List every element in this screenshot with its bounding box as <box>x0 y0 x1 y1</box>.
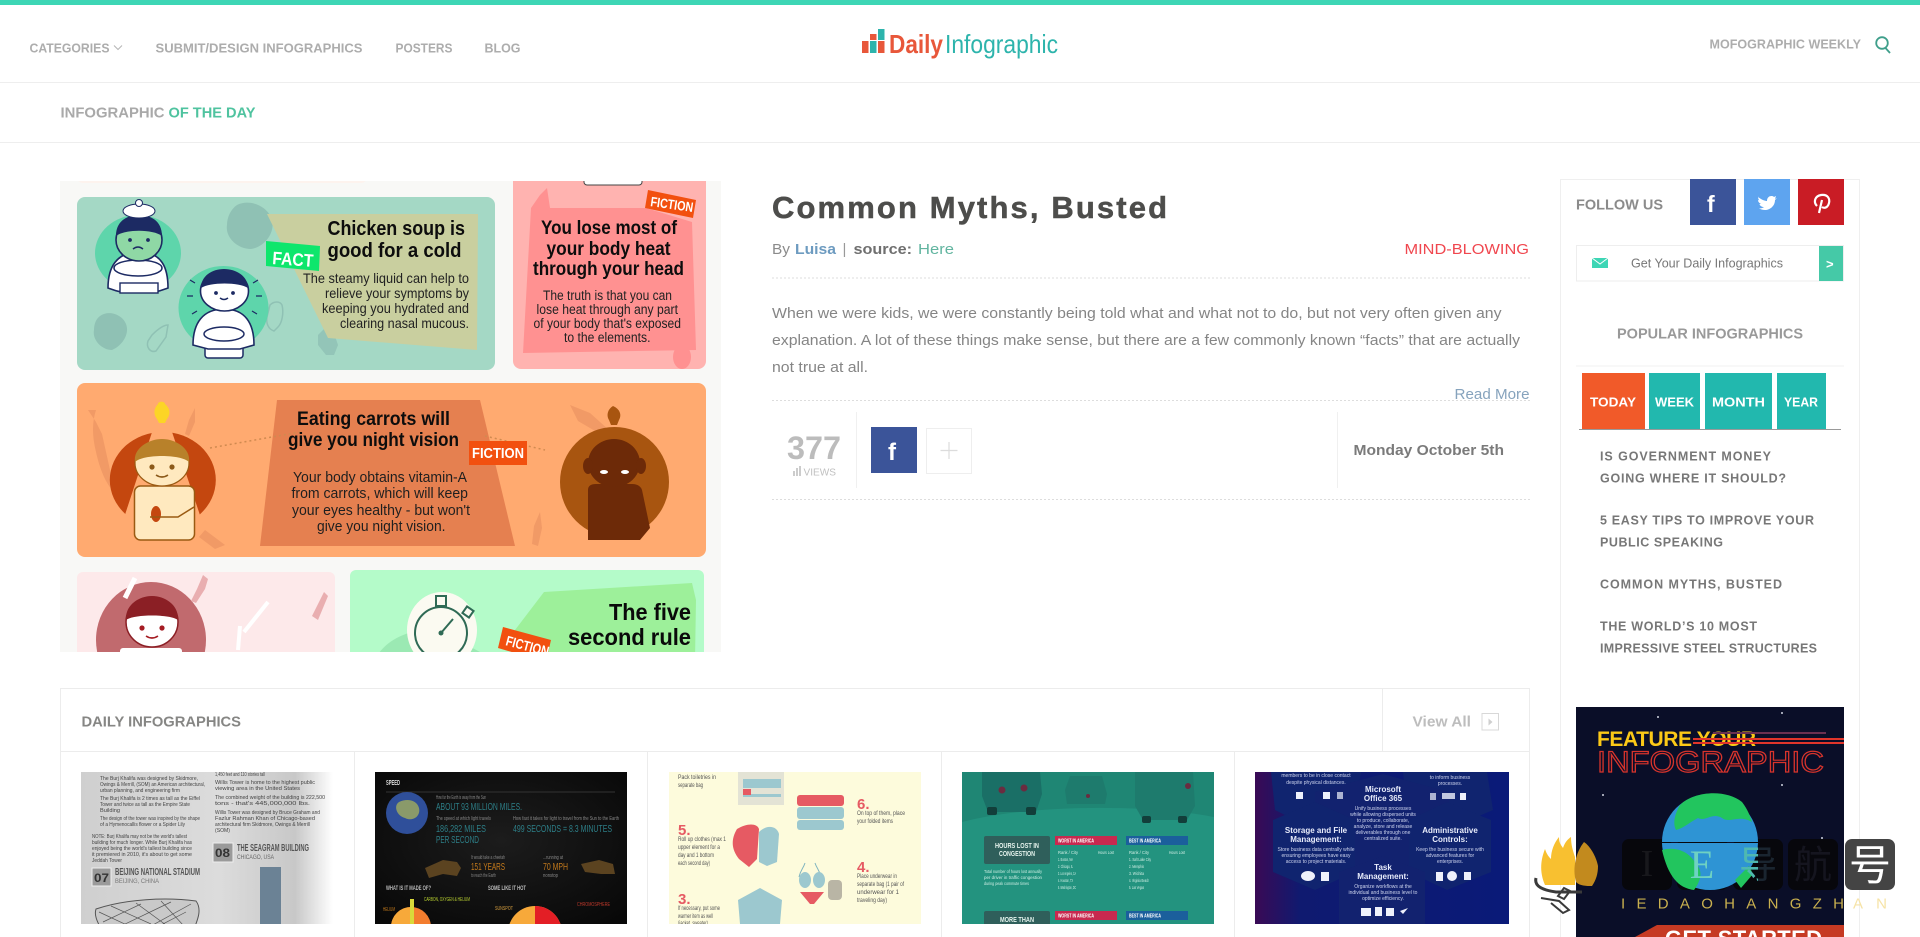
thumbnail: buildings: 1,450 feet and 110 stories tall <box>215 772 265 778</box>
thumbnail: traffic congestion: 3. Los Angeles, CA <box>1058 871 1076 876</box>
byline: Luisa <box>795 241 837 258</box>
category: MIND-BLOWING <box>1404 241 1529 258</box>
thumbnail: microsoft office 365: Management: <box>1357 872 1409 881</box>
nav menu links: CATEGORIES <box>30 42 110 56</box>
thumbnail: speed of light: 499 SECONDS = 8.3 MINUTES <box>513 824 612 835</box>
body text <box>534 288 681 345</box>
byline: source: <box>854 241 912 258</box>
thumbnail: speed of light: SUNSPOT <box>495 906 513 912</box>
weekly link: MOFOGRAPHIC WEEKLY <box>1710 38 1862 52</box>
thumbnail: traffic congestion: MORE THAN <box>1000 917 1034 924</box>
tag: fiction: FICTION <box>504 632 551 659</box>
thumbnail: traffic congestion: 1. Boston, MA <box>1058 857 1073 862</box>
thumbnail: speed of light: SOME LIKE IT HOT <box>488 886 526 892</box>
thumbnail: microsoft office 365: Microsoft <box>1365 785 1401 794</box>
thumbnail: speed of light: to reach the Earth <box>471 873 496 879</box>
thumbnail: buildings: (SOM) <box>215 828 230 834</box>
tabs: MONTH <box>1712 396 1765 410</box>
logo <box>862 29 1058 59</box>
thumbnail: buildings: The combined weight of the building is 222,500 <box>215 795 325 801</box>
thumbnail: buildings: 08 <box>215 846 230 860</box>
tag: fiction <box>469 441 527 465</box>
thumbnail: speed of light: PER SECOND <box>436 835 479 846</box>
icon: facebook share: f <box>888 439 897 466</box>
thumbnail: buildings: Building <box>100 808 120 814</box>
byline <box>772 241 954 258</box>
heading <box>328 218 465 262</box>
heading: Eating carrots will <box>297 408 450 430</box>
newsletter signup: Get Your Daily Infographics <box>1631 256 1783 270</box>
thumbnail: buildings: THE SEAGRAM BUILDING <box>237 843 309 854</box>
tag: fiction <box>645 190 696 218</box>
thumbnail: buildings: Tower and twice as tall as the Empire State <box>100 802 190 808</box>
sidebar <box>1560 179 1860 937</box>
thumbnail: traffic congestion: 5. Las Vegas <box>1129 885 1144 890</box>
thumbnail: buildings: Willis Tower is home to the highest public <box>215 780 316 786</box>
thumbnail: packing guide: your folded items <box>857 818 894 825</box>
thumbnail: packing guide <box>669 772 921 927</box>
badges: IE 导航号: E <box>1690 842 1714 887</box>
thumbnail: microsoft office 365: to inform business <box>1430 775 1471 781</box>
badges: IE 导航号: I <box>1641 843 1653 885</box>
body text: keeping you hydrated and <box>322 300 469 316</box>
thumbnail: speed of light: It would take a cheetah <box>471 855 505 861</box>
navigation bar <box>30 29 1890 59</box>
thumbnail: microsoft office 365: analyze, store and release <box>1354 824 1413 830</box>
watermark <box>1534 837 1895 914</box>
advertisement banner: FEATURE YOUR <box>1597 728 1756 751</box>
thumbnail: buildings: Jeddah Tower <box>92 858 122 864</box>
tag: fiction: FICTION <box>472 446 524 462</box>
thumbnail: traffic congestion: BEST IN AMERICA <box>1129 838 1161 844</box>
thumbnail: microsoft office 365: Store business data centrally while <box>1278 847 1355 853</box>
thumbnail: microsoft office 365: deliverables through one <box>1356 830 1411 836</box>
thumbnail: microsoft office 365: Unify business processes <box>1355 806 1412 812</box>
thumbnail: buildings: NOTE: Burj Khalifa may not be the world's tallest <box>92 834 188 840</box>
body text: relieve your symptoms by <box>325 285 469 301</box>
thumbnail: packing guide: separate bag (1 pair of <box>857 881 904 888</box>
thumbnail: traffic congestion: 1. Salt Lake City <box>1129 857 1152 862</box>
thumbnail: traffic congestion: Rank / City <box>1129 850 1150 855</box>
thumbnail: packing guide: warmer item as well <box>677 913 713 920</box>
heading: Chicken soup is <box>328 218 465 240</box>
logo: Daily <box>889 29 943 59</box>
thumbnail: speed of light: The speed at which light travels <box>436 816 491 822</box>
body text: give you night vision. <box>317 518 446 535</box>
thumbnail: speed of light: nonstop <box>543 873 558 879</box>
thumbnail: packing guide: traveling day) <box>857 897 887 904</box>
thumbnail: buildings: of a Hymenocallis flower or a Spider Lily <box>100 822 185 828</box>
body text: lose heat through any part <box>536 302 678 317</box>
heading: The five <box>609 599 691 625</box>
thumbnail: microsoft office 365: Controls: <box>1432 835 1468 844</box>
thumbnail: buildings: The design of the tower was inspired by the shape <box>100 816 200 822</box>
thumbnail: speed of light: 70 MPH <box>543 862 568 873</box>
character: boy in dark <box>560 406 669 540</box>
thumbnail: packing guide: (jacket, sweater) <box>678 920 708 927</box>
view count: 377 <box>787 430 841 466</box>
heading: good for a cold <box>328 240 462 262</box>
heading: second rule <box>568 624 691 650</box>
thumbnail: microsoft office 365: Storage and File <box>1285 826 1348 835</box>
thumbnail: speed of light: 186,282 MILES <box>436 824 486 835</box>
thumbnail: microsoft office 365: Management: <box>1290 835 1342 844</box>
heading <box>568 603 690 645</box>
watermark text: IEDAOHANGZH <box>1621 896 1844 912</box>
thumbnail: microsoft office 365: Keep the business secure with <box>1416 847 1484 853</box>
thumbnail: packing guide: day and 1 bottom <box>678 852 714 859</box>
callout trapezoid <box>260 400 515 546</box>
view all link: View All <box>1412 714 1471 730</box>
icon: facebook share <box>871 427 917 473</box>
popular list: GOING WHERE IT SHOULD? <box>1600 472 1786 486</box>
thumbnail: packing guide: 6. <box>857 796 870 813</box>
thumbnail: traffic congestion: Total number of hours lost annually <box>984 869 1043 874</box>
article summary <box>772 190 1530 500</box>
callout background <box>267 214 478 350</box>
thumbnail: packing guide: Place underwear in <box>857 873 897 880</box>
description: When we were kids, we were constantly being told what and what not to do, but not very often given any <box>772 305 1502 322</box>
hero infographic preview <box>60 181 721 652</box>
logo: Infographic <box>945 29 1058 59</box>
advertisement banner <box>1576 707 1844 937</box>
thumbnail: buildings: 07 <box>94 871 109 885</box>
thumbnail: microsoft office 365: Organize workflows at the <box>1354 884 1412 890</box>
thumbnail: buildings: enjoyed being the world's tallest building since <box>92 846 192 852</box>
thumbnail: microsoft office 365: individual and business level to <box>1349 890 1418 896</box>
thumbnail: traffic congestion: 4. Virginia Beach <box>1129 878 1149 883</box>
thumbnail: speed of light <box>375 772 627 937</box>
thumbnail: microsoft office 365: to produce, collaborate, <box>1357 818 1409 824</box>
icon: facebook <box>1690 179 1736 225</box>
body text: from carrots, which will keep <box>292 485 468 502</box>
nav menu links: POSTERS <box>396 42 452 56</box>
heading: your body heat <box>546 239 671 260</box>
heading: You lose most of <box>541 218 678 239</box>
body text: of your body that's exposed <box>534 316 681 331</box>
description: explanation. A lot of these things make sense, but there are a few commonly known “facts” that are actually <box>772 332 1521 349</box>
thumbnail: microsoft office 365: while allowing dispersed units <box>1350 812 1416 818</box>
nav menu links <box>30 42 520 56</box>
tabs: YEAR <box>1784 396 1818 410</box>
heading: through your head <box>533 259 684 280</box>
thumbnail: traffic congestion: 5. Washington, DC <box>1058 885 1076 890</box>
thumbnail: traffic congestion: BEST IN AMERICA <box>1129 914 1161 920</box>
heading <box>533 218 684 280</box>
thumbnail: traffic congestion: Rank / City <box>1058 850 1079 855</box>
thumbnail: buildings: Owings & Merrill, (SOM) an American architectural, <box>100 782 205 788</box>
heading: give you night vision <box>288 429 459 451</box>
icon: search <box>1876 37 1890 53</box>
body text: your eyes healthy - but won't <box>292 502 471 519</box>
description <box>772 305 1521 376</box>
thumbnail: microsoft office 365: optimize efficiency. <box>1362 896 1404 902</box>
section heading: infographic of the day: OF THE DAY <box>168 104 256 122</box>
body text: clearing nasal mucous. <box>340 315 469 331</box>
icon: pinterest <box>1798 179 1844 225</box>
tag: fiction <box>498 627 551 652</box>
section heading: infographic of the day <box>60 104 256 122</box>
thumbnail: microsoft office 365: despite physical distances. <box>1286 780 1346 786</box>
popular list <box>1600 450 1817 656</box>
body text <box>303 270 469 331</box>
thumbnail: traffic congestion: Hours Lost <box>1098 850 1115 855</box>
body text: Your body obtains vitamin-A <box>293 469 467 486</box>
thumbnail: buildings: The Burj Khalifa is 2 times as tall as the Eiffel <box>100 796 200 802</box>
panel: chicken soup <box>77 197 495 370</box>
thumbnail: speed of light: WHAT IS IT MADE OF? <box>386 886 431 892</box>
read more link: Read More <box>1454 386 1530 403</box>
thumbnail: microsoft office 365: centralized suite. <box>1364 836 1402 842</box>
icon: facebook: f <box>1707 191 1715 217</box>
icon: more share <box>926 428 972 474</box>
thumbnail: microsoft office 365: ensuring employees have easy <box>1282 853 1351 859</box>
body text <box>292 469 471 535</box>
thumbnail: buildings: viewing area in the United States <box>215 786 301 792</box>
tabs: TODAY <box>1590 396 1637 410</box>
popular heading: POPULAR INFOGRAPHICS <box>1617 326 1803 342</box>
tabs: WEEK <box>1655 396 1694 410</box>
thumbnail: traffic congestion <box>962 772 1214 931</box>
newsletter signup <box>1576 246 1844 281</box>
thumbnail: packing guide: 4. <box>857 859 870 876</box>
badges: IE 导航号: 导 <box>1739 845 1777 887</box>
thumbnail: traffic congestion: during peak commute times <box>984 881 1030 886</box>
thumbnail: speed of light: SPEED <box>386 780 400 787</box>
thumbnail: buildings: CHICAGO, USA <box>237 854 275 861</box>
thumbnail: microsoft office 365: Task <box>1374 863 1392 872</box>
thumbnail: packing guide: On top of them, place <box>857 810 905 817</box>
panel: body heat <box>513 170 706 369</box>
thumbnail: traffic congestion: 4. Houston, TX <box>1058 878 1073 883</box>
thumbnail: traffic congestion: 2. Memphis <box>1129 864 1144 869</box>
description: not true at all. <box>772 359 868 376</box>
thumbnail: microsoft office 365: Administrative <box>1422 826 1478 835</box>
thumbnail: buildings: tons - that's 445,000,000 lbs. <box>215 801 310 807</box>
watermark text: AN <box>1853 896 1887 912</box>
thumbnail: traffic congestion: HOURS LOST IN <box>995 843 1039 850</box>
top accent bar <box>0 0 1920 5</box>
thumbnail: packing guide: 3. <box>678 891 691 908</box>
thumbnail: speed of light: CHROMOSPHERE <box>577 902 611 908</box>
icon: twitter <box>1744 179 1790 225</box>
body text: The steamy liquid can help to <box>303 270 469 286</box>
date: Monday October 5th <box>1354 443 1504 459</box>
thumbnail: speed of light: How fast it takes for light to travel from the Sun to the Earth <box>513 816 619 822</box>
thumbnail: traffic congestion: Hours Lost <box>1169 850 1186 855</box>
thumbnail: speed of light: ABOUT 93 MILLION MILES. <box>436 802 522 813</box>
thumbnail: buildings: Willis Tower was designed by Bruce Graham and <box>215 810 320 816</box>
panel: daily infographics <box>60 688 1530 937</box>
icon: stopwatch <box>407 592 477 652</box>
character: sick boy <box>95 200 181 293</box>
popular list: IS GOVERNMENT MONEY <box>1600 450 1772 464</box>
section heading: infographic of the day: INFOGRAPHIC <box>60 104 165 122</box>
tag: fact <box>266 241 320 271</box>
thumbnail: speed of light: HELIUM <box>383 907 395 913</box>
title: Common Myths, Busted <box>772 190 1167 225</box>
tag: fact: FACT <box>272 248 314 271</box>
thumbnail: buildings: urban planning, and engineering firm <box>100 788 180 794</box>
heading: DAILY INFOGRAPHICS <box>82 714 241 730</box>
thumbnail: traffic congestion: 3. Wichita <box>1129 871 1144 876</box>
body text: The truth is that you can <box>543 288 672 303</box>
newsletter signup: > <box>1826 256 1834 272</box>
thumbnail: packing guide: underwear for 1 <box>857 889 899 896</box>
heading <box>288 411 458 450</box>
thumbnail: traffic congestion: per driver in traffic congestion <box>984 875 1042 880</box>
thumbnail: buildings: architectural firm Skidmore, Owings & Merrill <box>215 822 310 828</box>
thumbnail: speed of light: ...running at <box>543 855 563 861</box>
view count: VIEWS <box>804 468 836 478</box>
tabs <box>1579 373 1841 430</box>
badges: IE 导航号 <box>1622 839 1895 890</box>
nav menu links: SUBMIT/DESIGN INFOGRAPHICS <box>156 42 362 56</box>
thumbnail: traffic congestion: 2. Chicago, IL <box>1058 864 1073 869</box>
icon: flame hand logo <box>1536 837 1598 913</box>
popular list: PUBLIC SPEAKING <box>1600 536 1723 550</box>
thumbnail: buildings: building for much longer. While Burj Khalifa has <box>92 840 192 846</box>
thumbnail: packing guide: each second day) <box>678 860 710 867</box>
follow us: FOLLOW US <box>1576 196 1663 214</box>
popular list: THE WORLD’S 10 MOST <box>1600 620 1757 634</box>
byline: By <box>772 241 791 258</box>
panel: carrots <box>77 383 706 557</box>
tag: fiction: FICTION <box>650 194 694 215</box>
thumbnail: packing guide: 5. <box>678 822 691 839</box>
byline: Here <box>918 241 954 258</box>
character: boy in light <box>110 402 216 540</box>
panel: bones <box>77 572 335 652</box>
thumbnail: microsoft office 365 <box>1255 772 1509 924</box>
thumbnail: microsoft office 365: processes. <box>1438 781 1462 787</box>
thumbnail: traffic congestion: WORST IN AMERICA <box>1058 838 1094 844</box>
badges: IE 导航号: 航 <box>1794 845 1832 887</box>
thumbnail: buildings: BEIJING NATIONAL STADIUM <box>115 867 200 878</box>
earth in advertisement <box>1662 793 1758 842</box>
thumbnail: buildings: The Burj Khalifa was designed by Skidmore, <box>100 776 198 782</box>
thumbnail: buildings <box>81 772 333 929</box>
thumbnail: packing guide: separate bag <box>678 782 703 789</box>
thumbnail: packing guide: If necessary, put some <box>678 905 720 912</box>
thumbnail: buildings: Fazlur Rahman Khan of Chicago-based <box>215 816 315 822</box>
byline: | <box>842 241 846 258</box>
thumbnail: traffic congestion: WORST IN AMERICA <box>1058 914 1094 920</box>
thumbnail: buildings: BEIJING, CHINA <box>115 878 160 885</box>
thumbnail: packing guide: Pack toiletries in <box>678 774 716 781</box>
popular list: IMPRESSIVE STEEL STRUCTURES <box>1600 642 1817 656</box>
character: healthy boy <box>178 266 268 358</box>
thumbnail: microsoft office 365: members to be in close contact <box>1281 773 1351 779</box>
thumbnail: buildings: it premiered in 2010, it's about to get some <box>92 852 192 858</box>
badges: IE 导航号: 号 <box>1849 842 1891 889</box>
thumbnail: microsoft office 365: Office 365 <box>1364 794 1403 803</box>
popular list: 5 EASY TIPS TO IMPROVE YOUR <box>1600 514 1814 528</box>
thumbnail: traffic congestion: CONGESTION <box>999 851 1035 858</box>
thumbnail: speed of light: 151 YEARS <box>471 862 505 873</box>
body text: to the elements. <box>564 330 650 345</box>
popular list: COMMON MYTHS, BUSTED <box>1600 578 1782 592</box>
thumbnail: packing guide: upper element for a <box>678 844 720 851</box>
thumbnail: speed of light: How far the Earth is away from the Sun <box>436 795 486 801</box>
advertisement banner: INFOGRAPHIC <box>1597 746 1824 779</box>
thumbnail: speed of light: CARBON, OXYGEN & HELIUM <box>424 897 470 903</box>
thumbnail: microsoft office 365: advanced features for <box>1426 853 1475 859</box>
thumbnail: microsoft office 365: enterprises. <box>1437 859 1463 865</box>
view all link <box>1412 714 1498 730</box>
thumbnail: microsoft office 365: access to project materials. <box>1286 859 1346 865</box>
panel: five second rule <box>350 570 704 652</box>
thumbnail: packing guide: Roll up clothes (max 1 <box>678 836 726 843</box>
nav menu links: BLOG <box>484 42 520 56</box>
